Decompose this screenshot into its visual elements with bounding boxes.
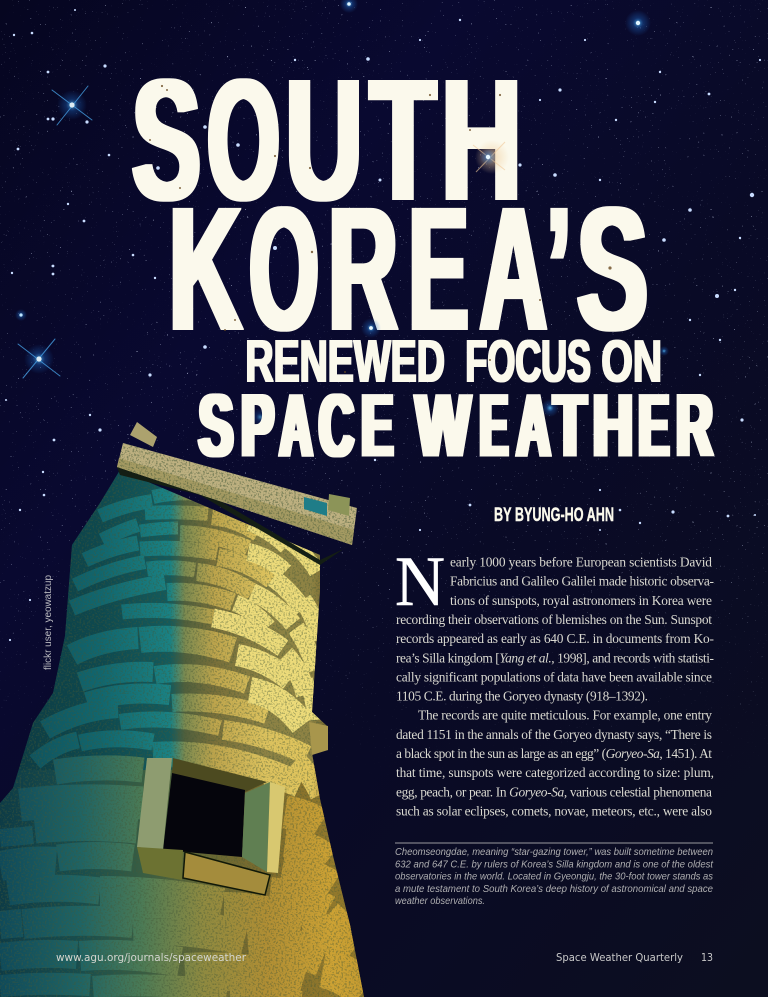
window lintel <box>172 758 267 792</box>
title line: Korea's: K <box>169 172 242 368</box>
body lines: recording their observations of blemishes on the Sun. Sunspot <box>396 612 712 627</box>
title line: Korea's: R <box>328 172 398 368</box>
subtitle line: renewed focus on: RENEWED <box>245 328 445 394</box>
title line: South: S <box>132 42 201 236</box>
body lines: The records are quite meticulous. For example, one entry <box>418 708 712 723</box>
window opening <box>163 773 245 857</box>
body lines: Fabricius and Galileo Galilei made historic observa- <box>450 574 714 589</box>
lower stones <box>0 768 365 996</box>
footer: url: www.agu.org/journals/spaceweather <box>56 951 246 964</box>
photo caption: a mute testament to South Korea’s deep history of astronomical and space <box>395 884 713 895</box>
star field <box>5 9 761 641</box>
bright stars with spikes <box>15 0 669 426</box>
photo caption: observatories in the world. Located in Gyeongju, the 30-foot tower stands as <box>395 872 713 883</box>
star over title H <box>473 140 509 174</box>
star: small left <box>15 309 27 321</box>
body lines: rea’s Silla kingdom [Yang et al., 1998], and records with statisti- <box>396 650 714 665</box>
drop cap: N <box>395 543 445 621</box>
star: lower left <box>18 339 60 378</box>
subtitle line: space weather: S <box>199 375 233 475</box>
title line: South: T <box>370 42 436 236</box>
footer: publication and page number: 13 <box>701 951 713 964</box>
title line: South <box>132 42 522 236</box>
footer: publication and page number: Space Weather Quarterly <box>556 951 683 964</box>
bright stones <box>213 522 320 725</box>
photo: Cheomseongdae tower <box>0 422 370 997</box>
subtitle line: space weather: E <box>362 375 393 475</box>
subtitle line: space weather: E <box>639 375 669 475</box>
photo caption: 632 and 647 C.E. by rulers of Korea’s Silla kingdom and is one of the oldest <box>395 859 714 870</box>
subtitle line: space weather: E <box>480 375 508 475</box>
star over Korea's R <box>361 318 381 338</box>
subtitle line: renewed focus on: FOCUS <box>465 328 591 394</box>
subtitle line: space weather: C <box>319 375 354 475</box>
cornice teal block <box>304 497 327 516</box>
subtitle line: space weather: W <box>416 375 470 475</box>
star: top right <box>625 10 651 36</box>
title line: South: H <box>441 42 522 236</box>
title line: Korea's: S <box>577 172 648 368</box>
subtitle line: space weather: T <box>554 375 586 475</box>
cornice top block <box>130 422 157 447</box>
tower body <box>0 440 370 997</box>
title line: South: O <box>207 42 280 236</box>
title line: Korea's: O <box>249 172 319 368</box>
title line: Korea's: E <box>409 172 468 368</box>
body lines <box>396 554 714 818</box>
title line: Korea's: A <box>480 172 547 368</box>
body lines: dated 1151 in the annals of the Goryeo dynasty says, “There is <box>396 727 712 742</box>
body lines: a black spot in the sun as large as an egg” (Goryeo-Sa, 1451). At <box>396 746 712 761</box>
subtitle line: space weather: P <box>241 375 274 475</box>
body lines: cally significant populations of data have been available since <box>396 669 712 684</box>
subtitle line: space weather: A <box>280 375 312 475</box>
star: top centre <box>340 0 358 13</box>
star: upper left <box>52 86 92 125</box>
subtitle line: space weather: H <box>593 375 633 475</box>
stone grain <box>0 440 370 997</box>
body lines: such as solar eclipses, comets, novae, meteors, etc., were also <box>396 804 712 818</box>
body lines: egg, peach, or pear. In Goryeo-Sa, various celestial phenomena <box>396 784 712 799</box>
stars behind subtitle <box>251 346 669 426</box>
subtitle line: space weather: A <box>517 375 550 475</box>
body lines: records appeared as early as 640 C.E. in documents from Ko- <box>396 631 714 646</box>
body lines: early 1000 years before European scientists David <box>450 554 712 570</box>
window right frame <box>242 782 270 872</box>
title line: South: U <box>286 42 362 236</box>
title <box>132 42 713 475</box>
body lines: tions of sunspots, royal astronomers in Korea were <box>450 593 712 608</box>
body lines: 1105 C.E. during the Goryeo dynasty (918–1392). <box>396 689 648 704</box>
photo caption: weather observations. <box>395 896 485 907</box>
body lines: that time, sunspots were categorized according to size: plum, <box>396 765 714 780</box>
window left frame <box>137 758 172 850</box>
upper stones <box>35 493 320 795</box>
subtitle line: renewed focus on: ON <box>601 328 662 394</box>
cornice underside <box>117 467 352 565</box>
title speckles <box>149 85 612 373</box>
photo credit: flickr user, yeowatzup <box>42 575 54 670</box>
right side buttress stone <box>309 722 328 755</box>
byline: BY BYUNG-HO AHN <box>494 504 614 526</box>
title line: Korea's <box>169 172 648 368</box>
cornice slab <box>117 443 357 545</box>
photo caption: Cheomseongdae, meaning “star-gazing tower,” was built sometime between <box>395 847 713 858</box>
title line: Korea's: ’ <box>548 172 570 368</box>
sill stones <box>137 847 183 880</box>
photo caption <box>395 843 714 907</box>
subtitle line: space weather: R <box>676 375 713 475</box>
subtitle line: space weather <box>199 375 713 475</box>
article text <box>395 543 714 818</box>
